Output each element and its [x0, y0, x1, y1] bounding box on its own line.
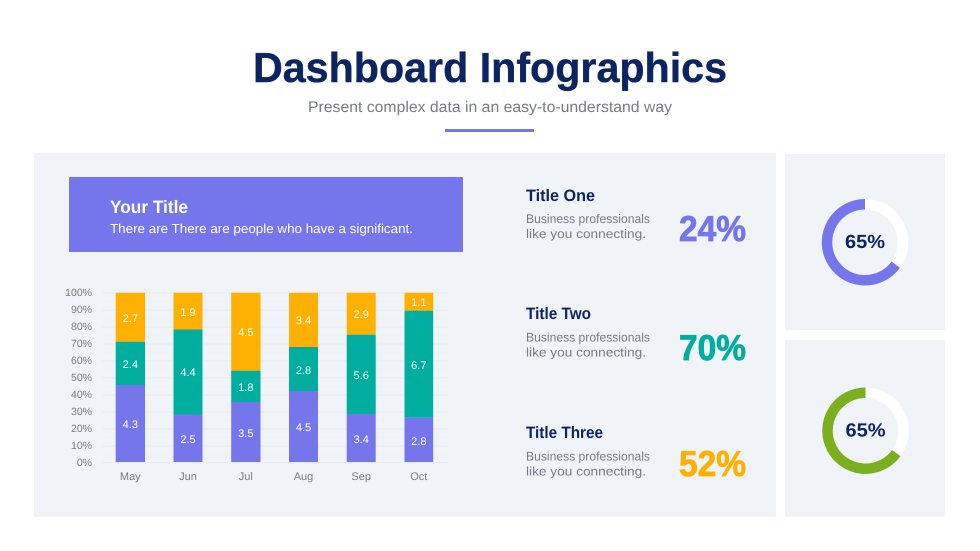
stacked bar chart — [65, 287, 448, 483]
bar: Aug: 2.8 — [296, 365, 311, 377]
stat: title two — [526, 305, 746, 368]
x axis labels: Oct — [410, 471, 427, 483]
donut track — [827, 204, 903, 280]
bar: Sep: 5.6 — [354, 370, 369, 382]
bar: Aug: 4.5 — [296, 422, 311, 434]
donut label: 65% — [846, 420, 886, 442]
y axis labels: 0% — [77, 457, 92, 469]
donut value arc — [827, 204, 896, 280]
stat: title three: Title Three — [526, 424, 603, 442]
bar: Sep — [347, 293, 376, 462]
stat: title one: like you connecting. — [526, 227, 646, 241]
panel: green donut — [785, 340, 945, 517]
banner text: There are There are people who have a significant. — [110, 221, 413, 236]
bar: May: 4.3 — [123, 419, 138, 431]
x axis labels: Sep — [351, 471, 371, 483]
y axis labels: 90% — [71, 304, 92, 316]
x axis labels: Jul — [239, 471, 253, 483]
x axis labels: May — [120, 471, 141, 483]
banner heading: Your Title — [110, 197, 188, 217]
stat: title three — [526, 424, 746, 484]
bar: Oct: 2.8 — [411, 436, 426, 448]
stat: title one: 24% — [679, 208, 746, 249]
donut track — [828, 393, 904, 469]
banner: your title — [69, 177, 463, 252]
title underline accent — [445, 129, 534, 132]
stat: title two: Business professionals — [526, 330, 650, 344]
bar: Oct: 1.1 — [411, 297, 426, 309]
bar: May: 2.4 — [123, 359, 138, 371]
stat: title three: 52% — [679, 443, 746, 484]
bar: Jun — [174, 293, 202, 462]
bar: Oct — [404, 293, 433, 462]
bar: Jul — [231, 293, 260, 462]
stat: title three: Business professionals — [526, 450, 650, 464]
bar: Jun: 1.9 — [180, 307, 196, 319]
x axis labels: Aug — [294, 471, 313, 483]
bar: Jun: 2.5 — [180, 434, 196, 446]
stat: title two: Title Two — [526, 305, 591, 323]
y axis labels: 50% — [71, 372, 92, 384]
y axis labels: 20% — [71, 423, 92, 435]
stat: title one — [526, 187, 746, 249]
stat: title three: like you connecting. — [526, 464, 646, 478]
bar: Sep: 2.9 — [354, 309, 369, 321]
y axis labels: 80% — [71, 321, 92, 333]
panel: main dashboard — [34, 153, 776, 517]
bar: Jun: 4.4 — [180, 367, 196, 379]
bar: May: 2.7 — [123, 313, 138, 325]
bar: Aug — [289, 293, 318, 462]
x axis labels: Jun — [179, 471, 197, 483]
x axis labels — [120, 471, 427, 483]
bar: Jul: 1.8 — [238, 382, 253, 394]
bar: Jul: 4.5 — [238, 327, 253, 339]
stat: title two: 70% — [679, 327, 746, 368]
title: Dashboard Infographics — [253, 44, 727, 91]
stat: title one: Business professionals — [526, 212, 650, 226]
stat: title one: Title One — [526, 187, 595, 205]
stat: title two: like you connecting. — [526, 346, 646, 360]
y axis labels: 10% — [71, 440, 92, 452]
bar: Jul: 3.5 — [238, 428, 253, 440]
bar: Aug: 3.4 — [296, 315, 311, 327]
bar: May — [116, 293, 145, 462]
bar: Oct: 6.7 — [411, 360, 426, 372]
donut label: 65% — [845, 232, 885, 253]
y axis labels: 60% — [71, 355, 92, 367]
y axis labels — [65, 287, 92, 469]
panel: purple donut — [785, 154, 945, 330]
y axis labels: 70% — [71, 338, 92, 350]
y axis labels: 40% — [71, 389, 92, 401]
donut value arc — [828, 393, 896, 469]
subtitle: Present complex data in an easy-to-understand way — [308, 99, 672, 116]
bar: Sep: 3.4 — [354, 434, 369, 446]
y axis labels: 100% — [65, 287, 92, 299]
y axis labels: 30% — [71, 406, 92, 418]
